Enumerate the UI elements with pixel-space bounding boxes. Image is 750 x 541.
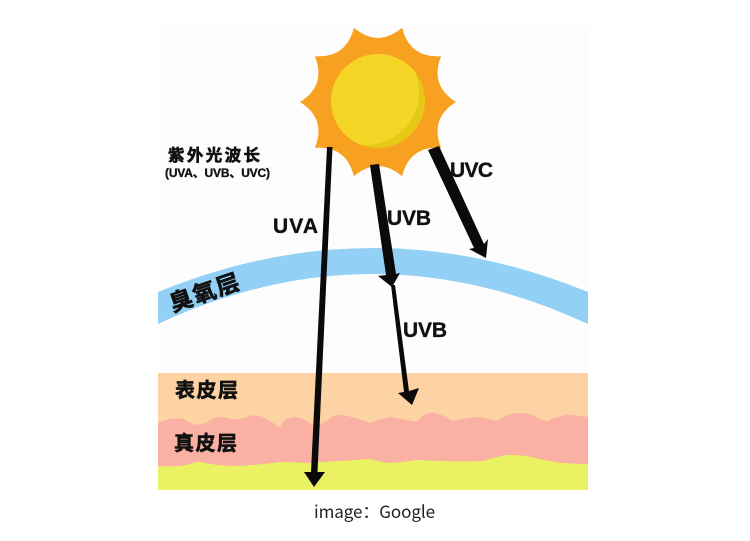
label: UVB lower: UVB [403,319,447,342]
heading: UV wavelengths: 紫外光波长 [168,146,260,165]
dermis layer [158,413,588,470]
arrow: UVC [428,146,488,258]
label: UVA: UVA [273,215,318,238]
arrow: UVB into epidermis [391,285,419,405]
skin layers [158,373,588,490]
subcutaneous layer [158,455,588,490]
sun rays [300,28,456,176]
label: ozone layer: 臭氧层 [166,269,243,317]
sun disc highlight [331,54,419,145]
label: dermis: 真皮层 [174,431,237,455]
infographic: UV penetration diagram [158,28,588,522]
label: UVB upper: UVB [387,207,431,230]
caption: image source: image：Google [314,498,435,523]
subheading: UV types: (UVA、UVB、UVC) [165,166,270,180]
icon: sun [300,28,456,176]
sun disc [331,54,425,148]
arrow: UVB through ozone [370,164,400,287]
label: epidermis: 表皮层 [175,379,238,402]
epidermis layer [158,373,588,490]
arrow: UVA [304,147,332,487]
panel: diagram background [158,25,588,490]
ozone layer band [158,248,588,324]
label: UVC: UVC [450,159,493,182]
